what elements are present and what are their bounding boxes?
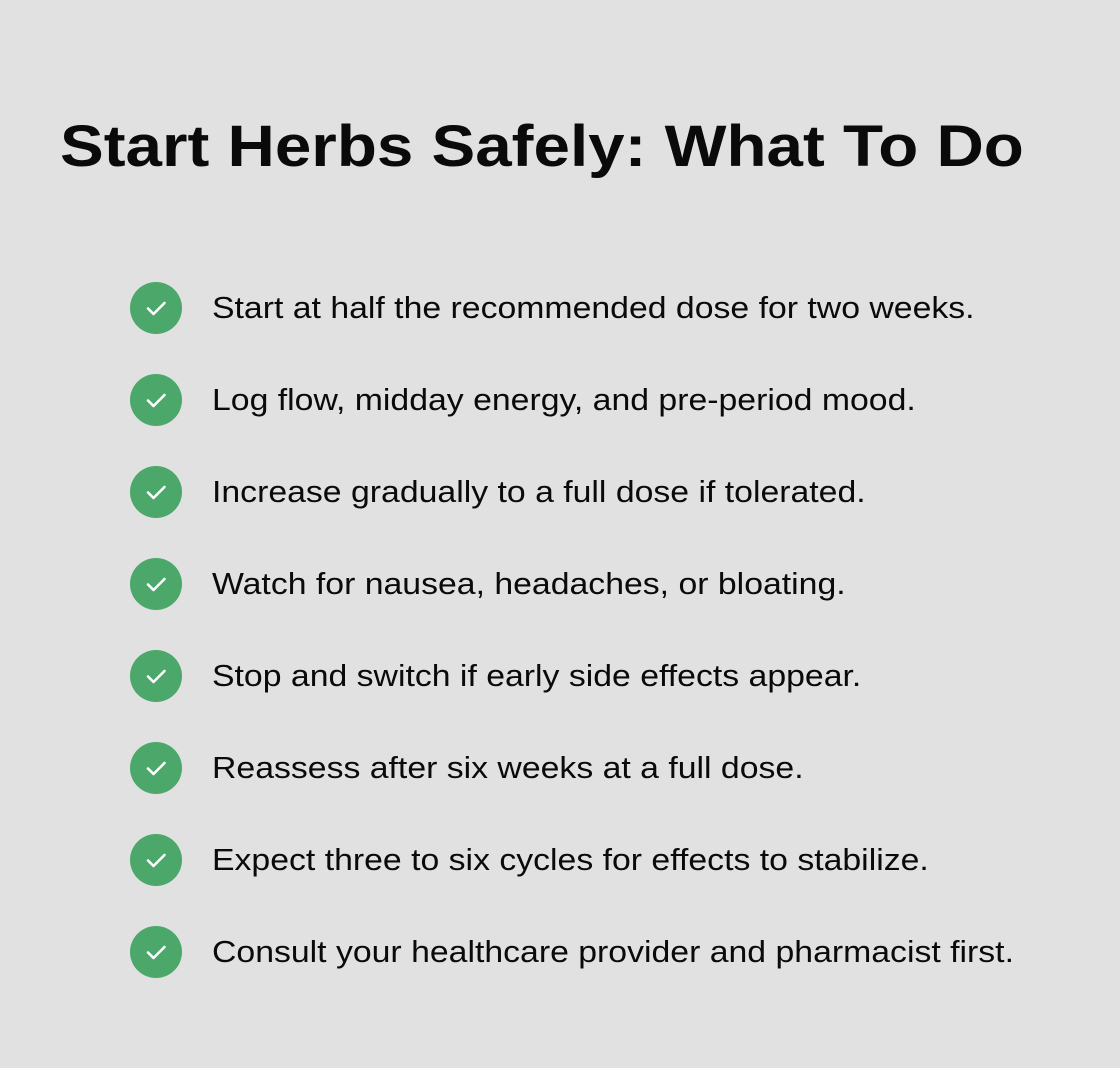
title: Start Herbs Safely: What To Do [60, 114, 1024, 179]
icon: check 7 [130, 834, 182, 886]
text 3: Increase gradually to a full dose if tolerated. [212, 474, 866, 509]
item 6 [130, 742, 804, 794]
item 7 [130, 834, 929, 886]
icon: check 1 [130, 282, 182, 334]
text 2: Log flow, midday energy, and pre-period mood. [212, 382, 916, 417]
text 4: Watch for nausea, headaches, or bloating. [212, 566, 846, 601]
text 8: Consult your healthcare provider and pharmacist first. [212, 934, 1014, 969]
item 2 [130, 374, 916, 426]
item 4 [130, 558, 846, 610]
text 5: Stop and switch if early side effects appear. [212, 658, 861, 693]
text 1: Start at half the recommended dose for two weeks. [212, 290, 975, 325]
item 3 [130, 466, 866, 518]
item 1 [130, 282, 975, 334]
icon: check 8 [130, 926, 182, 978]
text 6: Reassess after six weeks at a full dose. [212, 750, 804, 785]
item 5 [130, 650, 861, 702]
icon: check 4 [130, 558, 182, 610]
item 8 [130, 926, 1014, 978]
text 7: Expect three to six cycles for effects to stabilize. [212, 842, 929, 877]
icon: check 3 [130, 466, 182, 518]
icon: check 2 [130, 374, 182, 426]
icon: check 5 [130, 650, 182, 702]
icon: check 6 [130, 742, 182, 794]
